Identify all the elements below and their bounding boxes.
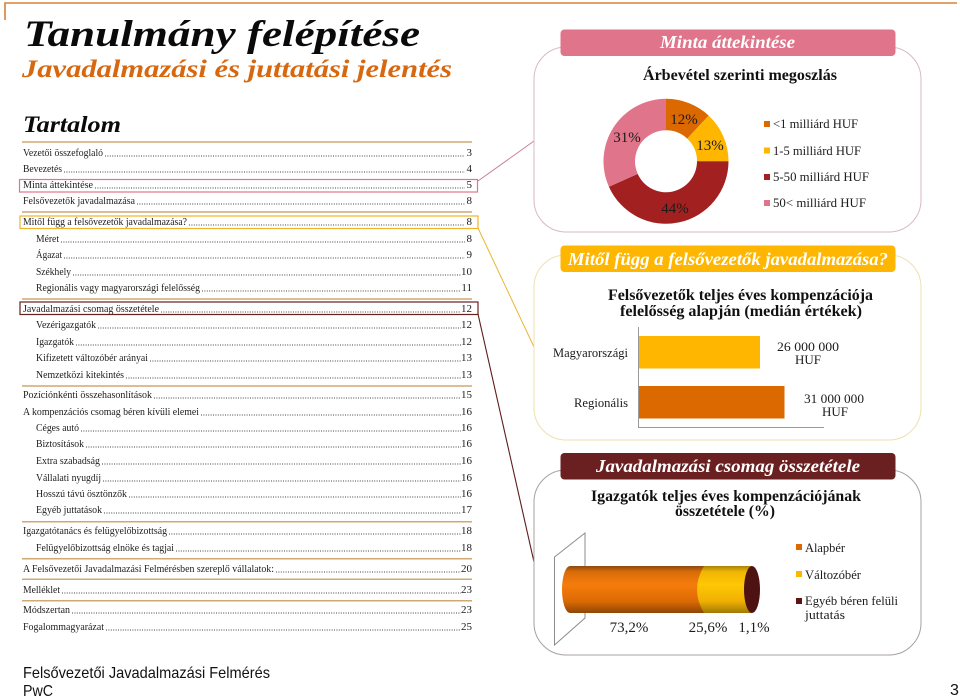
data labels: 13% xyxy=(696,138,724,154)
row: A Felsővezetői Javadalmazási Felmérésben xyxy=(23,563,472,575)
row: Ágazat: Ágazat xyxy=(36,249,62,261)
highlight box: Javadalmazási csomag xyxy=(20,302,478,314)
row: Fogalommagyarázat xyxy=(23,621,472,633)
chart title: felelősség alapján (medián értékek) xyxy=(620,303,862,320)
row: Melléklet: 23 xyxy=(461,584,472,596)
row: Mitől függ: 8 xyxy=(466,216,472,228)
row: Nemzetközi kitekintés xyxy=(36,369,472,381)
row: Extra szabadság xyxy=(36,455,472,467)
panel header xyxy=(560,453,896,480)
row: Vezérigazgatók xyxy=(36,319,472,331)
chart title: összetétele (%) xyxy=(675,503,775,520)
title: Tanulmány felépítése xyxy=(24,14,420,55)
row: Fogalommagyarázat: Fogalommagyarázat xyxy=(23,621,104,633)
row: Kifizetett változóbér arányai: Kifizetett változóbér arányai xyxy=(36,352,148,364)
row: Mitől függ: Mitől függ a felsővezetők javadalmazása? xyxy=(23,216,187,228)
row: Céges autó xyxy=(36,422,472,434)
data labels xyxy=(613,112,724,217)
footer: Felsővezetői Javadalmazási Felmérés xyxy=(23,665,270,682)
chart title: Árbevétel szerinti megoszlás xyxy=(643,65,837,84)
row: Méret xyxy=(36,233,472,245)
row: Méret: 8 xyxy=(466,233,472,245)
row: Igazgatótanács: Igazgatótanács és felügyelőbizottság xyxy=(23,525,167,537)
row: A Felsővezetői Javadalmazási Felmérésben: 20 xyxy=(461,563,472,575)
footer xyxy=(23,665,959,697)
row: Regionális: 11 xyxy=(461,282,472,294)
data labels xyxy=(610,620,770,636)
row: Vezetői összefoglaló: Vezetői összefoglaló xyxy=(23,147,103,159)
row: Extra szabadság: 16 xyxy=(461,455,472,467)
legend xyxy=(796,540,898,622)
legend: 50< milliárd HUF xyxy=(773,195,866,210)
row: Melléklet: Melléklet xyxy=(23,584,60,596)
panel header xyxy=(560,246,896,272)
row: Javadalmazási csomag összetétele xyxy=(23,303,472,315)
row: Egyéb juttatások: Egyéb juttatások xyxy=(36,504,102,516)
row: Vállalati nyugdíj: 16 xyxy=(461,472,472,484)
row: Felügyelőbizottság elnöke xyxy=(36,542,472,554)
row: Vállalati nyugdíj: Vállalati nyugdíj xyxy=(36,472,101,484)
row: Kifizetett változóbér arányai xyxy=(36,352,472,364)
legend: 1-5 milliárd HUF xyxy=(773,143,861,158)
panel header: Javadalmazási csomag összetétele xyxy=(595,456,860,476)
highlight box: Minta áttekintése xyxy=(20,180,478,192)
row: Székhely xyxy=(36,266,472,278)
row: Biztosítások xyxy=(36,438,472,450)
chart title xyxy=(608,287,873,320)
row: Igazgatótanács: 18 xyxy=(461,525,472,537)
row: Felsővezetők javadalmazása: Felsővezetők javadalmazása xyxy=(23,195,135,207)
row: Felsővezetők javadalmazása xyxy=(23,195,472,207)
data labels: 12% xyxy=(670,112,698,128)
arrow: Mitől függ connector xyxy=(478,228,534,347)
legend: Változóbér xyxy=(805,567,862,582)
row: Ágazat xyxy=(36,249,472,261)
row: Székhely: Székhely xyxy=(36,266,71,278)
row: Vezetői összefoglaló: 3 xyxy=(466,147,472,159)
bar chart: HUF xyxy=(822,404,848,419)
legend: juttatás xyxy=(804,607,845,622)
row: Felsővezetők javadalmazása: 8 xyxy=(466,195,472,207)
row: Minta áttekintése: 5 xyxy=(466,179,472,191)
row: Módszertan: Módszertan xyxy=(23,604,70,616)
row: Felügyelőbizottság elnöke: Felügyelőbizottság elnöke és tagjai xyxy=(36,542,174,554)
row: Extra szabadság: Extra szabadság xyxy=(36,455,100,467)
table of contents list xyxy=(23,147,472,633)
row: Bevezetés: Bevezetés xyxy=(23,163,62,175)
row: Biztosítások: 16 xyxy=(461,438,472,450)
bar chart xyxy=(553,327,864,428)
3D cylinder bar chart xyxy=(554,533,770,645)
row: Céges autó: Céges autó xyxy=(36,422,79,434)
data labels: 31% xyxy=(613,130,641,146)
row: Igazgatók: Igazgatók xyxy=(36,336,74,348)
row: Regionális xyxy=(36,282,472,294)
data labels: 44% xyxy=(661,201,689,217)
row: Minta áttekintése xyxy=(23,179,472,191)
legend: <1 milliárd HUF xyxy=(773,116,858,131)
row: Fogalommagyarázat: 25 xyxy=(461,621,472,633)
row: Minta áttekintése: Minta áttekintése xyxy=(23,179,93,191)
row: Felügyelőbizottság elnöke: 18 xyxy=(461,542,472,554)
data labels: 1,1% xyxy=(738,620,770,636)
panel: Javadalmazási csomag összetétele xyxy=(534,453,921,655)
table of contents heading: Tartalom xyxy=(23,112,121,137)
bar chart: 26 000 000 xyxy=(777,339,839,354)
arrow: Javadalmazási connector xyxy=(478,314,534,562)
row: A kompenzációs csomag: A kompenzációs csomag béren kívüli elemei xyxy=(23,406,199,418)
row: Céges autó: 16 xyxy=(461,422,472,434)
chart title: Igazgatók teljes éves kompenzációjának xyxy=(591,488,861,505)
row: Egyéb juttatások xyxy=(36,504,472,516)
subtitle: Javadalmazási és juttatási jelentés xyxy=(21,56,452,83)
donut chart xyxy=(604,99,728,224)
panel header: Minta áttekintése xyxy=(659,32,795,52)
row: Igazgatók xyxy=(36,336,472,348)
panel: Minta áttekintése xyxy=(534,30,921,232)
row: Pozíciónkénti összehasonlítások: Pozíciónkénti összehasonlítások xyxy=(23,389,152,401)
panel header: Mitől függ a felsővezetők javadalmazása? xyxy=(567,249,888,269)
row: Pozíciónkénti összehasonlítások xyxy=(23,389,472,401)
data labels: 25,6% xyxy=(689,620,727,636)
row: Pozíciónkénti összehasonlítások: 15 xyxy=(461,389,472,401)
row: Egyéb juttatások: 17 xyxy=(461,504,472,516)
row: Javadalmazási csomag összetétele: Javadalmazási csomag összetétele xyxy=(23,303,159,315)
row: Regionális: Regionális vagy magyarországi felelősség xyxy=(36,282,200,294)
panel: Mitől függ a felsővezetők javadalmazása xyxy=(534,246,921,440)
arrow: Minta connector xyxy=(478,141,534,181)
row: Melléklet xyxy=(23,584,472,596)
bar chart: HUF xyxy=(795,352,821,367)
row: Ágazat: 9 xyxy=(466,249,472,261)
row: Módszertan: 23 xyxy=(461,604,472,616)
data labels: 73,2% xyxy=(610,620,648,636)
row: Igazgatótanács xyxy=(23,525,472,537)
row: Módszertan xyxy=(23,604,472,616)
panel header xyxy=(560,30,896,56)
legend: Egyéb béren felüli xyxy=(805,593,898,608)
row: A kompenzációs csomag: 16 xyxy=(461,406,472,418)
row: Székhely: 10 xyxy=(461,266,472,278)
legend: 5-50 milliárd HUF xyxy=(773,169,869,184)
highlight box: Mitől függ xyxy=(20,216,478,228)
row: A kompenzációs csomag xyxy=(23,406,472,418)
row: Hosszú távú ösztönzők xyxy=(36,488,472,500)
row: Nemzetközi kitekintés: Nemzetközi kitekintés xyxy=(36,369,124,381)
row: Javadalmazási csomag összetétele: 12 xyxy=(461,303,472,315)
row: Vezetői összefoglaló xyxy=(23,147,472,159)
row: Vezérigazgatók: Vezérigazgatók xyxy=(36,319,96,331)
bar chart: Magyarországi xyxy=(553,345,628,360)
row: Kifizetett változóbér arányai: 13 xyxy=(461,352,472,364)
legend: Alapbér xyxy=(805,540,846,555)
row: A Felsővezetői Javadalmazási Felmérésben: A Felsővezetői Javadalmazási Felmérésben szereplő vállalatok: xyxy=(23,563,274,575)
row: Hosszú távú ösztönzők: 16 xyxy=(461,488,472,500)
legend xyxy=(764,116,869,210)
row: Vállalati nyugdíj xyxy=(36,472,472,484)
bar chart: 31 000 000 xyxy=(804,391,864,406)
row: Mitől függ xyxy=(23,216,472,228)
row: Bevezetés xyxy=(23,163,472,175)
row: Vezérigazgatók: 12 xyxy=(461,319,472,331)
row: Igazgatók: 12 xyxy=(461,336,472,348)
bar chart: Regionális xyxy=(574,395,628,410)
chart title: Felsővezetők teljes éves kompenzációja xyxy=(608,287,873,304)
row: Nemzetközi kitekintés: 13 xyxy=(461,369,472,381)
row: Bevezetés: 4 xyxy=(466,163,472,175)
row: Hosszú távú ösztönzők: Hosszú távú ösztönzők xyxy=(36,488,127,500)
row: Biztosítások: Biztosítások xyxy=(36,438,84,450)
row: Méret: Méret xyxy=(36,233,59,245)
chart title xyxy=(591,488,861,520)
